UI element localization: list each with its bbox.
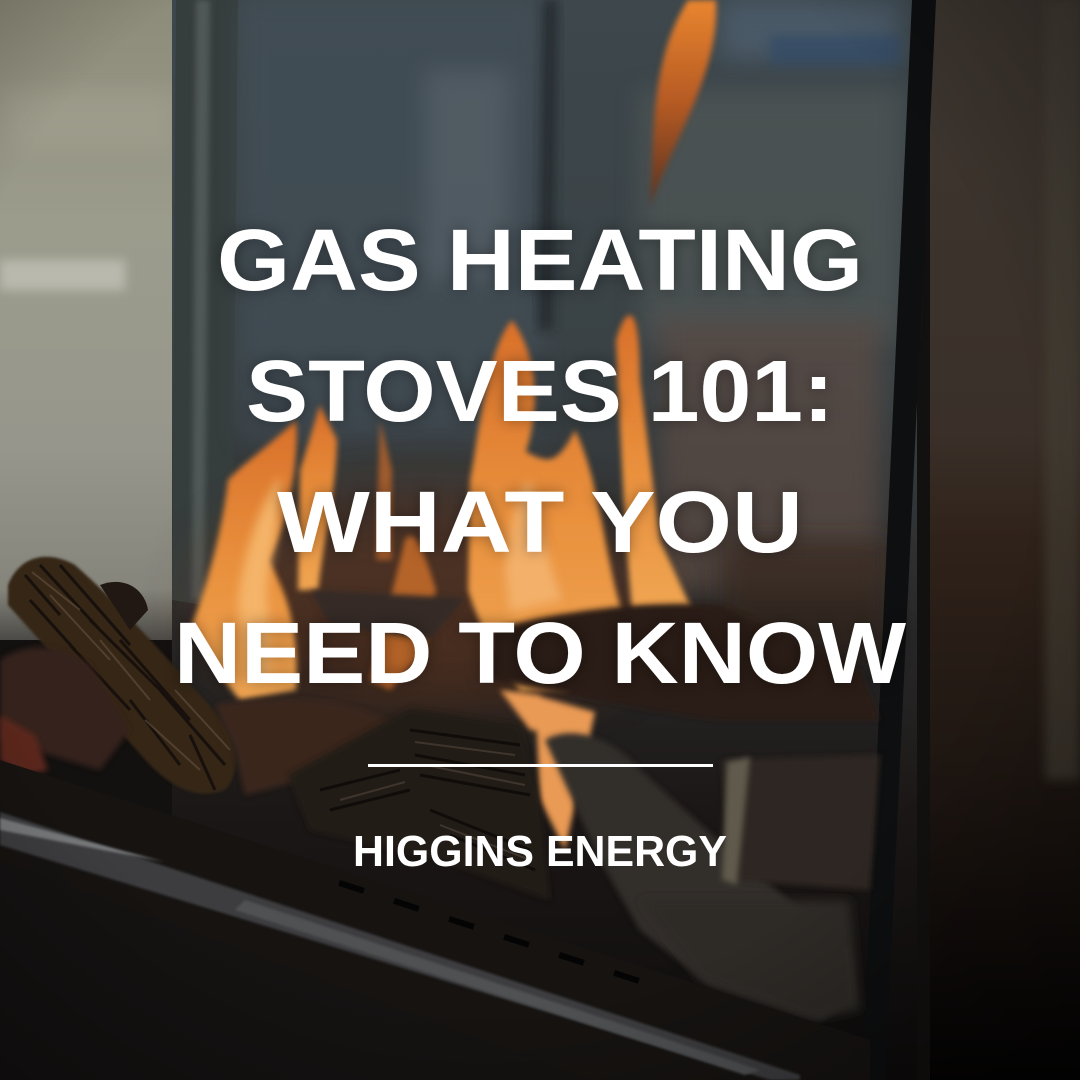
title: STOVES 101: [246,343,834,440]
right wall and frame [862,0,1080,1080]
title: WHAT YOU [277,474,803,571]
brand name: HIGGINS ENERGY [353,827,727,876]
stove base rail [0,760,870,1080]
title: GAS HEATING [217,212,863,309]
logs [0,557,880,1020]
title [174,212,907,702]
flames [192,0,716,850]
divider line [368,764,713,767]
glass pane and reflections [172,0,917,1080]
title: NEED TO KNOW [174,605,907,702]
